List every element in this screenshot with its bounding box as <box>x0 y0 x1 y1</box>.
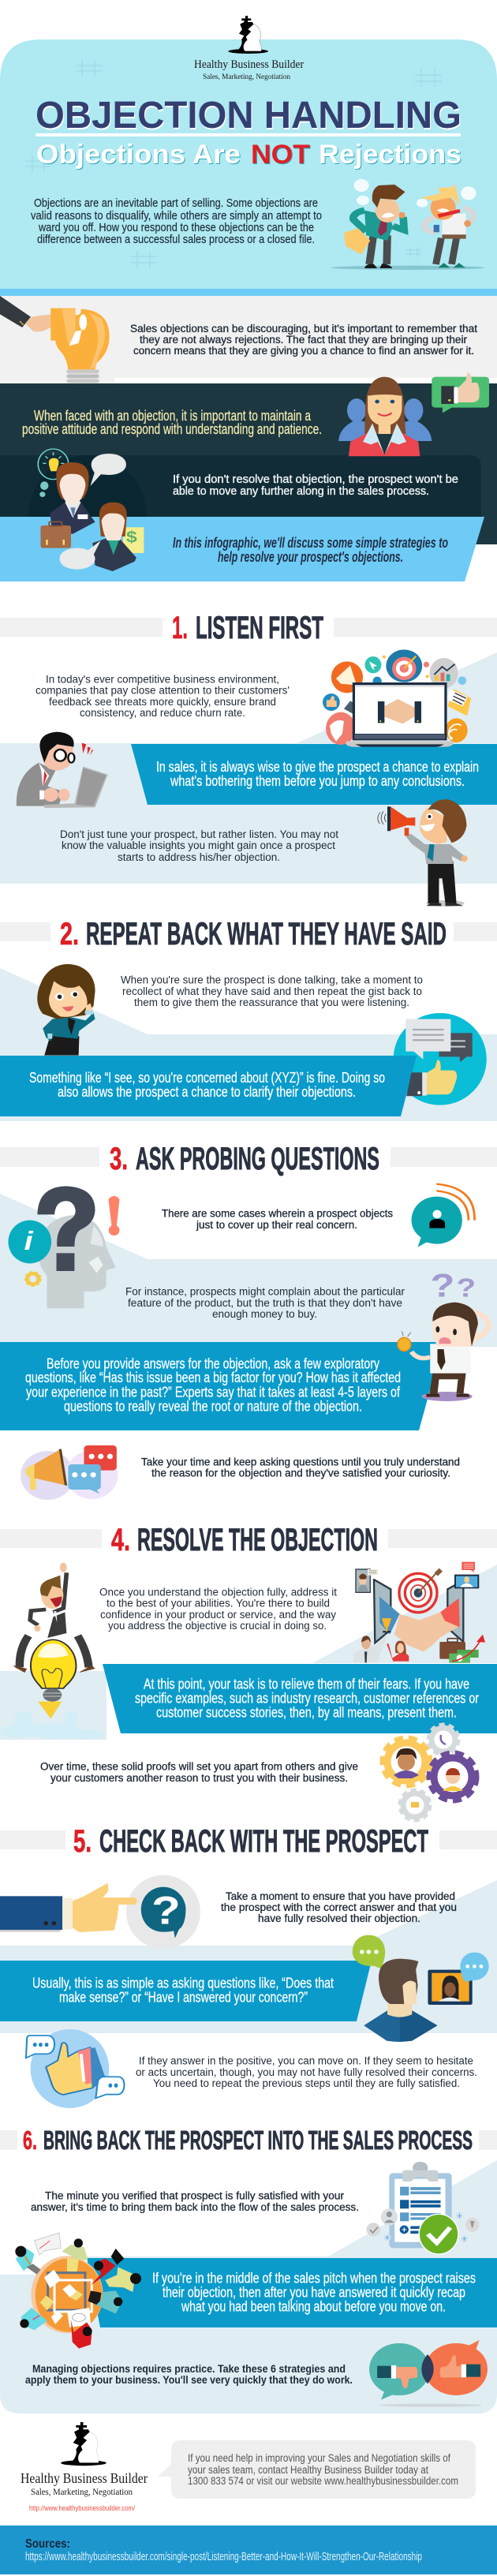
banner: sales pitch <box>152 2271 476 2315</box>
heading: 3. <box>110 1142 128 1176</box>
icon: man on video call <box>353 1935 489 2042</box>
text: take your time: Take your time and keep asking questions until you truly understand <box>141 1456 460 1467</box>
banner: I see: Something like “I see, so you're concerned about (XYZ)” is fine. Doing so <box>29 1070 385 1086</box>
text: positive attitude: When faced with an objection, it is important to maintain a <box>34 408 312 424</box>
text: address it <box>99 1586 337 1632</box>
heading: 5. <box>73 1824 92 1859</box>
panel: contact footer <box>21 2422 476 2512</box>
text: flow of the sales process <box>31 2190 359 2213</box>
logo: chess pieces <box>61 2422 106 2466</box>
text: real concern: just to cover up their real concern. <box>196 1219 357 1231</box>
callout: contact: If you need help in improving your Sales and Negotiation skills of <box>188 2452 450 2464</box>
text: resolve objection: able to move any further along in the sales process. <box>173 485 429 498</box>
text: flow of the sales process: The minute you verified that prospect is fully satisfied with your <box>45 2190 345 2201</box>
text: requires practice: Managing objections requires practice. Take these 6 strategies and <box>32 2362 346 2375</box>
icon: woman with team <box>338 377 432 456</box>
panel: dark attitude section <box>0 372 497 581</box>
heading: LISTEN FIRST <box>196 611 323 645</box>
icon: megaphone and chat <box>21 1445 118 1500</box>
icon: businessman riding rocket bulb <box>0 1563 105 1739</box>
panel: header <box>0 16 497 296</box>
icon: chat circle <box>394 1013 487 1105</box>
banner: exploratory questions <box>0 1342 443 1430</box>
panel: sources <box>0 2526 497 2574</box>
icon: team around table <box>15 2233 141 2349</box>
banner: relieve fears <box>135 1676 479 1720</box>
icon: two businessmen <box>38 449 144 571</box>
text: tune your prospect: Don't just tune your prospect, but rather listen. You may not <box>60 828 338 840</box>
text: solid proofs: Over time, these solid proofs will set you apart from others and give <box>40 1761 358 1772</box>
icon: man with laptop <box>17 732 108 808</box>
text: solid proofs <box>40 1761 358 1784</box>
heading: 2. <box>60 917 79 952</box>
banner: strategies <box>0 517 484 581</box>
text: customers feedback: feedback see threats more quickly, ensure brand <box>49 696 276 708</box>
section 6: bring back <box>0 2125 497 2413</box>
text: customers feedback <box>36 674 290 719</box>
text: recollect <box>121 974 423 1008</box>
text: take a moment <box>221 1890 457 1924</box>
icon: speech bubbles and hand <box>405 1019 473 1096</box>
text: recollect: recollect of what they have said and then repeat the gist back to <box>122 985 422 997</box>
text: resolve objection: If you don't resolve that objection, the prospect won't be <box>173 473 458 486</box>
icon: person speech bubble <box>412 1184 475 1247</box>
logo: chess pieces <box>228 16 268 54</box>
icon: laptop with marketing icons <box>323 649 471 747</box>
callout: contact <box>158 2440 476 2499</box>
logo text: Sales, Marketing, Negotiation <box>203 73 290 81</box>
icon: thumbs up speech bubble <box>432 372 489 413</box>
logo text: http://www.healthybusinessbuilder.com/ <box>29 2504 135 2512</box>
text: move on: or acts uncertain, though, you may not have fully resolved their concerns. <box>136 2066 477 2078</box>
icon: head with question mark <box>8 1186 119 1308</box>
icon: thumbs down and thumbs up <box>369 2340 488 2407</box>
intro text: valid reasons to disqualify, while others are simply an attempt to <box>31 209 322 222</box>
section 5: check back <box>0 1824 497 2108</box>
logo text: Healthy Business Builder <box>194 58 304 71</box>
intro text: Objections are an inevitable part of selling. Some objections are <box>34 196 318 210</box>
text: tune your prospect <box>60 828 338 863</box>
icon: confused man with coin <box>398 1266 488 1401</box>
text: sales objections <box>130 323 477 357</box>
text: requires practice <box>25 2362 353 2386</box>
banner: does that make sense <box>32 1976 334 2006</box>
text: real concern <box>162 1207 393 1231</box>
subtitle: Objections Are <box>36 140 241 170</box>
title: OBJECTION HANDLING <box>36 95 462 136</box>
heading: 4. <box>111 1523 130 1557</box>
logo text <box>194 58 304 81</box>
icon: clipboard checklist <box>366 2162 480 2254</box>
intro text: ward you off. How you respond to these objections can be the <box>38 221 314 234</box>
text: requires practice: apply them to your business. You'll see very quickly that they do work. <box>25 2373 353 2386</box>
callout: contact: 1300 833 574 or visit our website www.healthybusinessbuilder.com <box>188 2475 458 2487</box>
text: address it: to the best of your abilities. You're there to build <box>106 1597 330 1610</box>
text: tune your prospect: starts to address his/her objection. <box>118 851 280 863</box>
text: solid proofs: your customers another reason to trust you with their business. <box>50 1772 348 1784</box>
icon: thumbs up with chat <box>26 2029 125 2108</box>
text: positive attitude <box>22 408 322 437</box>
text: flow of the sales process: answer, it's time to bring them back into the flow of the sales process. <box>31 2201 359 2213</box>
icon: handshake from screens <box>353 1562 485 1663</box>
icon: confused man with coin: ? <box>457 1273 476 1303</box>
banner: give the prospect a chance <box>156 759 479 789</box>
banner: exploratory questions: Before you provide answers for the objection, ask a few exploratory <box>47 1355 379 1371</box>
section 4: resolve the objection <box>0 1523 497 1820</box>
logo text <box>21 2470 148 2512</box>
icon: hand and puzzle bulb <box>0 296 110 383</box>
text: customers feedback: In today's ever competitive business environment, <box>46 674 279 685</box>
subtitle: Rejections <box>319 140 462 170</box>
text: for instance: enough money to buy. <box>212 1308 317 1320</box>
logo text: Healthy Business Builder <box>21 2470 148 2486</box>
banner: does that make sense: Usually, this is as simple as asking questions like, “Does that <box>32 1976 334 1991</box>
intro text: difference between a successful sales process or a closed file. <box>37 233 315 246</box>
icon: confused man with coin: ? <box>431 1266 454 1303</box>
text: move on <box>136 2054 477 2089</box>
banner: I see: also allows the prospect a chance to clarify their objections. <box>58 1084 356 1100</box>
text: real concern: There are some cases wherein a prospect objects <box>162 1207 393 1220</box>
intro text <box>31 196 322 246</box>
text: move on: You need to repeat the previous steps until they are fully satisfied. <box>153 2077 460 2089</box>
text: customers feedback: consistency, and reduce churn rate. <box>80 707 245 719</box>
icon: woman pointing <box>37 964 95 1056</box>
icon: gears with people <box>383 1725 476 1820</box>
text: address it: confidence in your product or service, and the way <box>100 1609 336 1621</box>
panel: sales objections <box>0 296 497 383</box>
icon: two businessmen: $ <box>126 527 137 546</box>
text: positive attitude: positive attitude and respond with understanding and patience. <box>22 421 322 437</box>
banner: I see <box>0 1056 417 1116</box>
banner: exploratory questions: questions, like “Has this issue been a big factor for you? How has it affected <box>25 1370 401 1385</box>
text: take your time: the reason for the objection and they've satisfied your curiosity. <box>151 1467 450 1479</box>
heading: 6. <box>23 2125 37 2155</box>
text: address it: you address the objective is crucial in doing so. <box>108 1620 327 1632</box>
text: recollect: them to give them the reassurance that you were listening. <box>134 996 409 1008</box>
text: take a moment: have fully resolved their objection. <box>258 1912 420 1924</box>
callout: contact: your sales team, contact Healthy Business Builder today at <box>188 2464 428 2476</box>
icon: arguing men <box>331 179 484 270</box>
text: recollect: When you're sure the prospect is done talking, take a moment to <box>121 974 423 986</box>
banner: strategies: help resolve your prospect's objections. <box>218 549 403 565</box>
text: take your time <box>141 1456 460 1479</box>
text: tune your prospect: know the valuable insights you might gain once a prospect <box>62 839 335 851</box>
subtitle <box>36 140 462 170</box>
text: sales objections: concern means that they are giving you a chance to find an answer for it. <box>133 345 474 357</box>
section 3: probing questions <box>0 1142 497 1500</box>
text: for instance: feature of the product, but the truth is that they don't have <box>128 1297 402 1309</box>
banner: does that make sense: make sense?” or “Have I answered your concern?” <box>59 1990 308 2006</box>
text: take a moment: Take a moment to ensure that you have provided <box>226 1890 455 1902</box>
text: resolve objection <box>173 473 458 498</box>
text: move on: If they answer in the positive, you can move on. If they seem to hesitate <box>139 2054 473 2067</box>
heading: 1. <box>172 611 188 645</box>
banner: exploratory questions: questions to really reveal the root or nature of the objection. <box>64 1398 362 1414</box>
logo text: Sales, Marketing, Negotiation <box>31 2488 133 2497</box>
panel: sources: Sources: <box>25 2537 70 2551</box>
text: address it: Once you understand the objection fully, address it <box>99 1586 337 1598</box>
text: sales objections: they are not always rejections. The fact that they are bringing up their <box>140 334 468 346</box>
section 1: listen first <box>0 611 497 907</box>
icon: head with question mark: i <box>24 1226 34 1255</box>
section 2: repeat back <box>0 917 497 1121</box>
text: for instance <box>125 1286 405 1320</box>
text: take a moment: the prospect with the correct answer and that you <box>221 1901 457 1913</box>
text: for instance: For instance, prospects might complain about the particular <box>125 1286 405 1297</box>
subtitle: NOT <box>251 140 310 170</box>
icon: pointing hand and question bubble: ? <box>151 1888 181 1932</box>
text: customers feedback: companies that pay close attention to their customers' <box>36 685 290 696</box>
icon: pointing hand and question bubble <box>0 1875 200 1949</box>
heading <box>0 611 497 645</box>
text: sales objections: Sales objections can be discouraging, but it's important to remember that <box>130 323 477 335</box>
icon: man with megaphone <box>378 799 468 907</box>
banner: exploratory questions: your experience in the past?” Experts say that it takes at least 4-5 layers of <box>26 1384 401 1400</box>
